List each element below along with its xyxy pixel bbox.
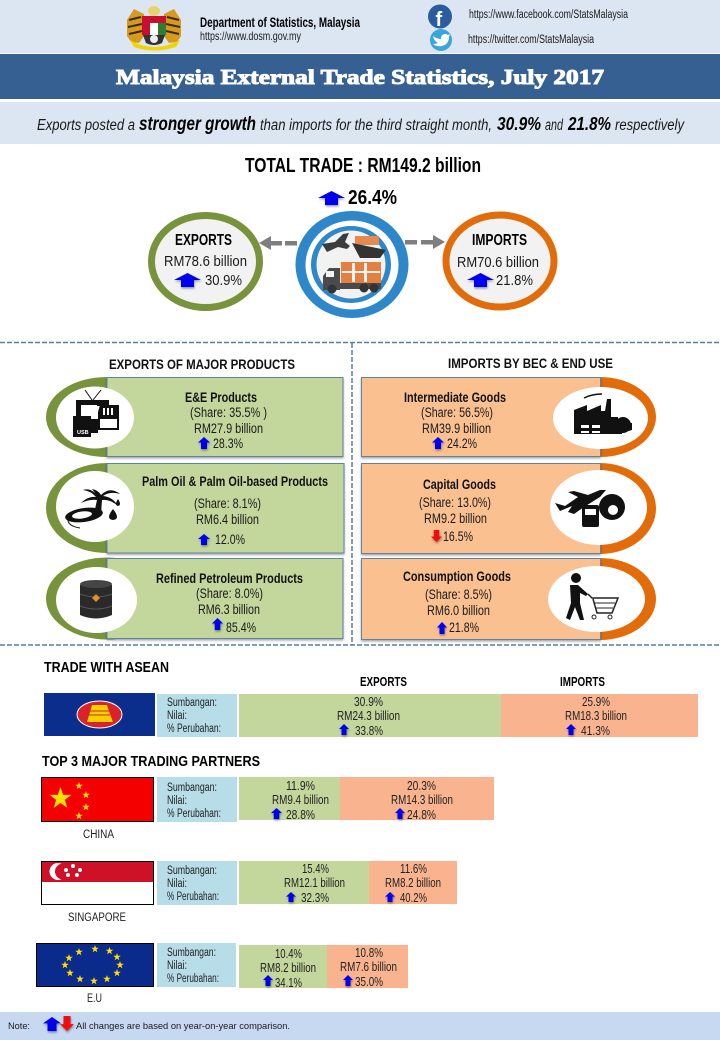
subtitle: Exports posted a — [37, 117, 135, 134]
card: consumption goods: RM6.0 billion — [427, 603, 490, 618]
exports circle — [152, 216, 260, 308]
label block — [157, 943, 236, 987]
icon: ship — [352, 236, 386, 258]
caption: E.U: E.U — [87, 993, 102, 1005]
exports values: RM24.3 billion — [337, 709, 400, 723]
card: E&E products: E&E Products — [185, 390, 257, 405]
card: intermediate goods: 24.2% — [447, 436, 477, 451]
imports values: 25.9% — [582, 695, 610, 709]
exports values — [239, 777, 340, 822]
card: consumption goods: (Share: 8.5%) — [425, 587, 492, 602]
icon: electronics — [73, 390, 119, 437]
imports values: 40.2% — [400, 891, 427, 905]
card: intermediate goods: RM39.9 billion — [422, 421, 491, 436]
imports values: 20.3% — [407, 779, 436, 793]
card: consumption goods: 21.8% — [449, 620, 479, 635]
icon: facebook — [428, 4, 452, 31]
facebook link: https://www.facebook.com/StatsMalaysia — [469, 9, 628, 21]
card: consumption goods: Consumption Goods — [403, 569, 511, 584]
label block: Sumbangan: — [167, 865, 217, 877]
flag: China — [42, 778, 154, 822]
imports circle: IMPORTS — [472, 232, 527, 249]
card: palm oil: 12.0% — [215, 532, 245, 547]
subtitle: 21.8% — [567, 114, 611, 134]
exports values — [239, 694, 501, 738]
label block: % Perubahan: — [167, 891, 219, 903]
exports values: RM8.2 billion — [260, 961, 316, 975]
label block: Nilai: — [167, 795, 187, 807]
imports values — [501, 694, 698, 738]
exports circle: RM78.6 billion — [164, 254, 247, 270]
flag: Singapore — [42, 862, 154, 904]
subtitle: 30.9% — [497, 114, 541, 134]
exports values — [239, 861, 369, 905]
card: intermediate goods: Intermediate Goods — [404, 390, 506, 405]
card: refined petroleum: Refined Petroleum Products — [156, 571, 303, 586]
panel: imports by BEC and end use — [362, 356, 656, 640]
total trade change — [318, 187, 397, 209]
exports values: 28.8% — [286, 808, 315, 822]
card: palm oil: (Share: 8.1%) — [194, 496, 261, 511]
card: palm oil: RM6.4 billion — [196, 512, 259, 527]
heading: imports by BEC: IMPORTS BY BEC & END USE — [448, 356, 613, 371]
total trade heading: TOTAL TRADE : RM149.2 billion — [245, 155, 481, 177]
imports circle: 21.8% — [496, 273, 533, 289]
card: capital goods — [362, 463, 656, 554]
imports values — [340, 777, 494, 822]
panel: exports of major products — [46, 357, 344, 640]
card: E&E products: RM27.9 billion — [194, 421, 263, 436]
label block: % Perubahan: — [167, 808, 221, 820]
card: capital goods: RM9.2 billion — [424, 511, 487, 526]
imports values: RM14.3 billion — [391, 793, 453, 807]
column heading: exports: EXPORTS — [360, 675, 407, 689]
exports values: 15.4% — [302, 862, 329, 876]
row: Singapore — [42, 861, 457, 924]
website: https://www.dosm.gov.my — [200, 29, 301, 43]
label block — [157, 861, 237, 905]
footer note — [0, 1012, 720, 1040]
card: capital goods: 16.5% — [443, 529, 473, 544]
imports values: RM18.3 billion — [565, 709, 627, 723]
imports values — [369, 861, 457, 905]
imports circle: RM70.6 billion — [457, 255, 539, 271]
label block: % Perubahan: — [167, 723, 221, 735]
organisation name: Department of Statistics, Malaysia — [200, 15, 360, 30]
card: intermediate goods — [362, 377, 656, 457]
subtitle — [0, 102, 720, 144]
label block: Nilai: — [167, 878, 187, 890]
exports values: 32.3% — [301, 891, 329, 905]
card: E&E products — [46, 377, 343, 457]
imports values: 10.8% — [355, 946, 383, 960]
heading: top 3 major trading partners: TOP 3 MAJOR TRADING PARTNERS — [42, 753, 260, 770]
subtitle: than imports for the third straight month, — [260, 117, 492, 134]
imports values: RM7.6 billion — [340, 960, 397, 974]
flag: E.U — [36, 944, 154, 986]
arrow to imports — [405, 235, 445, 249]
label block — [157, 777, 237, 822]
exports values: 33.8% — [355, 724, 383, 738]
imports values: 35.0% — [355, 975, 383, 989]
imports values: RM8.2 billion — [385, 876, 441, 890]
column heading: imports: IMPORTS — [560, 675, 605, 689]
exports values — [239, 945, 327, 990]
caption: China: CHINA — [83, 829, 114, 841]
icon: facebook: f — [436, 9, 442, 31]
title banner: Malaysia External Trade Statistics, July 2017 — [116, 65, 604, 89]
icon: plane — [322, 233, 350, 252]
imports values: 41.3% — [581, 724, 610, 738]
icon: electronics: USB — [77, 430, 89, 436]
card: refined petroleum: (Share: 8.0%) — [196, 586, 263, 601]
card: refined petroleum — [46, 558, 343, 640]
exports values: 34.1% — [275, 976, 302, 990]
row: China — [42, 777, 494, 841]
icon: truck — [323, 262, 381, 294]
imports values: 24.8% — [407, 808, 436, 822]
twitter link: https://twitter.com/StatsMalaysia — [468, 34, 594, 46]
card: intermediate goods: (Share: 56.5%) — [421, 405, 493, 420]
exports values: 11.9% — [286, 779, 315, 793]
row: E.U — [36, 943, 408, 1005]
imports circle — [446, 215, 554, 307]
heading: trade with ASEAN: TRADE WITH ASEAN — [44, 659, 169, 676]
card: E&E products: (Share: 35.5% ) — [190, 405, 267, 420]
central trade icon — [296, 211, 408, 318]
icon: factory — [574, 394, 632, 434]
label block: Sumbangan: — [167, 947, 216, 959]
exports values: RM12.1 billion — [284, 876, 345, 890]
exports values: RM9.4 billion — [272, 793, 329, 807]
label block: Nilai: — [167, 960, 187, 972]
card: palm oil: Palm Oil & Palm Oil-based Products — [142, 474, 328, 489]
exports circle: EXPORTS — [175, 232, 232, 249]
label block: Sumbangan: — [167, 782, 217, 794]
caption: Singapore: SINGAPORE — [68, 912, 126, 924]
total trade change: 26.4% — [348, 187, 397, 209]
flag: ASEAN — [44, 693, 155, 736]
icon: plane, bus and gear — [555, 490, 625, 527]
footer note: Note: — [8, 1021, 30, 1032]
card: refined petroleum: RM6.3 billion — [198, 602, 260, 617]
card: consumption goods — [362, 558, 656, 640]
exports values: 30.9% — [354, 695, 383, 709]
icon: twitter — [430, 29, 452, 51]
icon: Malaysian coat of arms — [127, 6, 181, 50]
card: capital goods: Capital Goods — [423, 477, 496, 492]
header band — [0, 0, 720, 53]
label block: Nilai: — [167, 710, 187, 722]
icon: palm oil — [64, 489, 120, 528]
exports circle: 30.9% — [205, 273, 242, 289]
subtitle: and — [545, 117, 564, 134]
card: E&E products: 28.3% — [213, 436, 243, 451]
row: ASEAN — [44, 693, 698, 738]
footer note: All changes are based on year-on-year comparison. — [76, 1021, 290, 1032]
arrow to exports — [259, 236, 297, 250]
imports values — [327, 945, 408, 989]
label block — [157, 694, 237, 737]
card: capital goods: (Share: 13.0%) — [419, 495, 491, 510]
card: palm oil — [46, 463, 344, 553]
subtitle: stronger growth — [139, 114, 256, 135]
heading: exports of major products: EXPORTS OF MAJOR PRODUCTS — [109, 357, 295, 372]
icon: oil barrel — [80, 580, 112, 618]
card: refined petroleum: 85.4% — [226, 620, 256, 635]
title banner — [0, 54, 720, 99]
exports values: 10.4% — [275, 947, 302, 961]
subtitle: respectively — [615, 117, 685, 134]
icon: shopping cart — [566, 573, 618, 620]
imports values: 11.6% — [400, 862, 427, 876]
label block: Sumbangan: — [167, 697, 217, 709]
label block: % Perubahan: — [167, 973, 219, 985]
